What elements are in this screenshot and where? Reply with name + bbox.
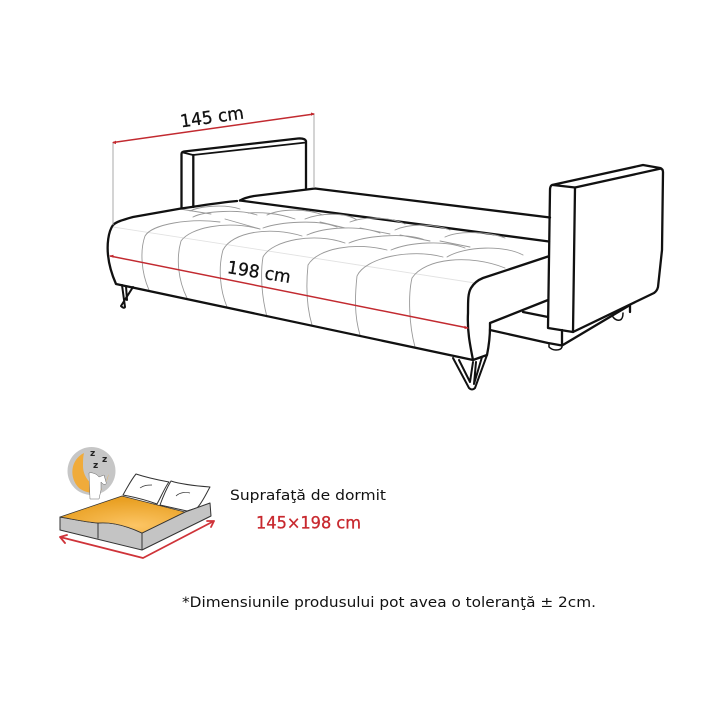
icon: bed with sleeping moon	[60, 447, 214, 558]
pull-out lower frame	[490, 305, 630, 350]
back-left armrest	[182, 138, 306, 208]
icon: moon badge: z	[102, 455, 107, 465]
icon: red size arrows	[60, 521, 214, 558]
right armrest	[548, 165, 663, 332]
icon: moon badge: z	[93, 461, 98, 471]
value: sleeping surface size: 145×198 cm	[256, 514, 361, 532]
icon: mattress top	[60, 496, 185, 533]
icon: mattress seams	[98, 523, 142, 550]
tufted seat tufting lines	[113, 206, 523, 347]
width dimension: 145 cm: 145 cm	[179, 104, 245, 132]
rear left leg	[121, 285, 133, 308]
length dimension: 198 cm	[109, 255, 469, 329]
seat cushion outline	[108, 201, 548, 360]
icon: moon badge: z	[90, 449, 95, 459]
label: sleeping surface: Suprafaţă de dormit	[230, 488, 387, 504]
length dimension: 198 cm: 198 cm	[226, 258, 292, 288]
icon: mattress sides	[60, 503, 211, 550]
width dimension: 145 cm	[112, 104, 315, 225]
back rest, folded flat	[240, 188, 550, 242]
sofa bed line drawing	[108, 138, 663, 390]
footnote: tolerance: *Dimensiunile produsului pot avea o toleranţă ± 2cm.	[182, 595, 596, 611]
icon: pillows	[123, 474, 210, 511]
icon: moon badge	[68, 447, 116, 499]
front right leg	[453, 355, 487, 390]
